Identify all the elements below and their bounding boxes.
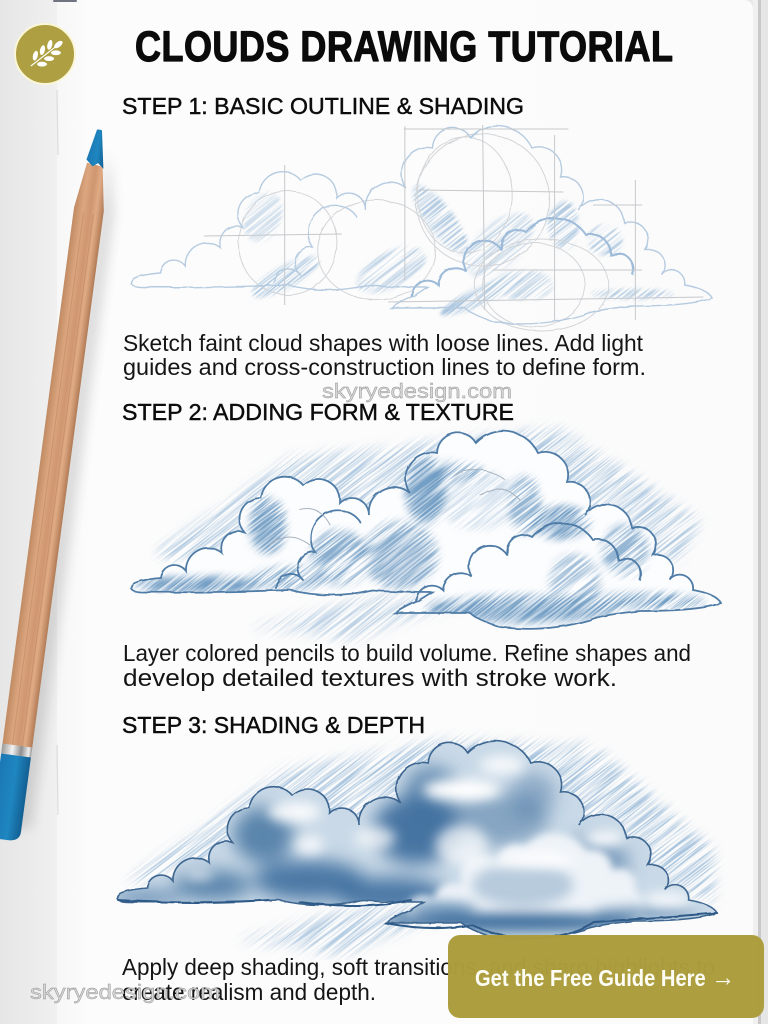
left page [0,0,57,1024]
step 3 description: Apply deep shading, soft transitions, and sharp highlights to [122,954,715,980]
step 2 description: Layer colored pencils to build volume. Refine shapes and [123,640,691,666]
step 3 cloud drawing [116,732,722,960]
pencil [0,128,124,843]
step 2 description: develop detailed textures with stroke work. [123,665,617,692]
pencil shadow [7,150,122,835]
step 2 cloud drawing [130,422,722,646]
step 3 cloud body [117,741,717,939]
step 2 panel [100,399,740,692]
watermark bottom: skyryedesign.com [30,982,220,1004]
step 2 shading [132,454,708,628]
step 1 shading hatches [242,184,674,318]
pencil wood body [2,162,110,754]
step 1 cloud sketch [130,124,714,332]
step 3 panel [85,712,736,1005]
step 3 deep shading [111,756,696,931]
step 3 background hatching [126,732,722,960]
step 1 outline [131,126,712,324]
step 2 cloud body [131,431,721,629]
pencil blue end [0,753,31,842]
step 3 highlights [185,756,693,907]
step 3 outline [117,741,717,939]
step 3 description: create realism and depth. [122,979,376,1005]
step 1 description: guides and cross-construction lines to define form. [123,354,646,380]
step 3 front cloud [407,833,645,925]
step 1 guide lines [204,125,703,320]
step 1 panel [100,93,731,380]
step 3 heading: STEP 3: SHADING & DEPTH [122,712,425,738]
step 1 description: Sketch faint cloud shapes with loose lines. Add light [123,330,644,356]
logo badge [15,24,75,84]
icon: wheat sprig [24,33,69,74]
step 2 heading: STEP 2: ADDING FORM & TEXTURE [122,399,514,425]
pencil ferrule [1,744,32,757]
step 1 heading: STEP 1: BASIC OUTLINE & SHADING [122,93,524,119]
button label: Get the Free Guide Here → [475,962,735,992]
watermark: skyryedesign.com [322,381,512,403]
step 1 construction circles [238,134,609,331]
call-to-action button [448,935,764,1018]
title: CLOUDS DRAWING TUTORIAL [135,23,673,71]
pencil blue tip [86,128,108,169]
step 2 outline [131,431,721,629]
step 2 background hatching [154,422,704,646]
